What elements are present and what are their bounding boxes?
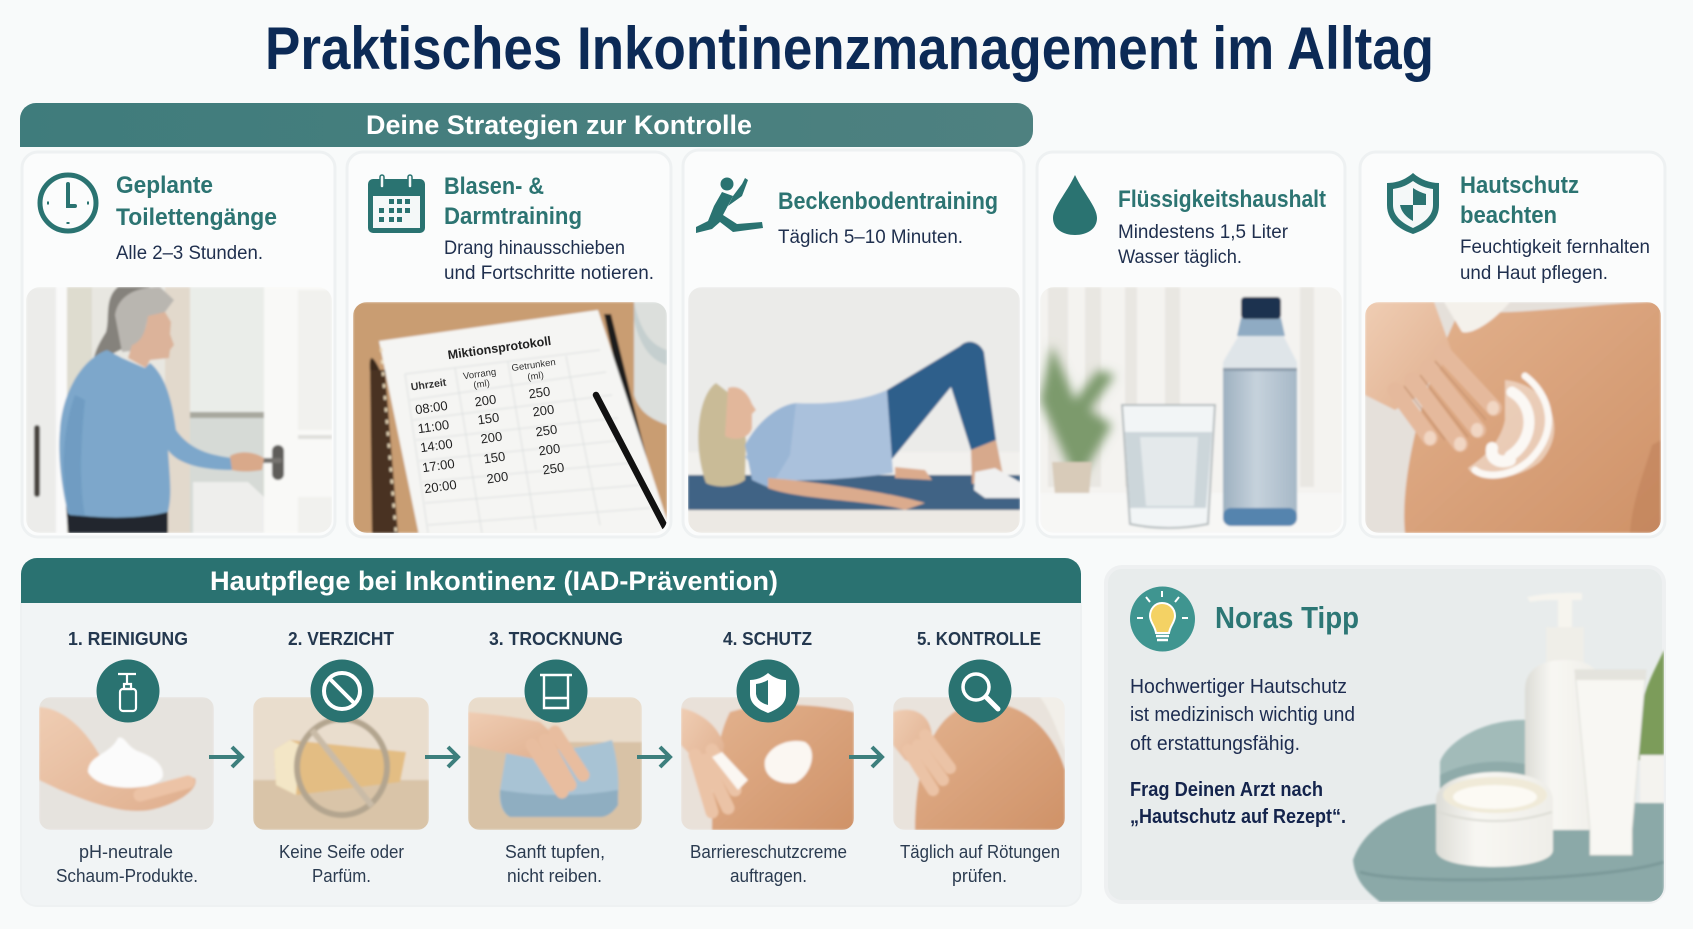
photo: voiding diary on desk: 14:00 <box>419 436 454 455</box>
photo: voiding diary on desk: 150 <box>483 449 506 466</box>
photo: foam in hand <box>39 697 214 830</box>
step heading: 1. REINIGUNG <box>68 629 188 649</box>
icon: clock <box>40 175 96 231</box>
step 5: Kontrolle <box>893 629 1065 886</box>
heading: Beckenbodentraining: Beckenbodentraining <box>778 188 998 215</box>
heading banner: Deine Strategien zur Kontrolle: Deine Strategien zur Kontrolle <box>366 110 752 140</box>
heading: Hautschutz beachten: beachten <box>1460 202 1557 229</box>
photo: voiding diary on desk: 200 <box>480 429 503 446</box>
photo: voiding diary on desk: (ml) <box>527 370 545 383</box>
panel: Hautschutz beachten <box>1360 152 1665 537</box>
heading: Hautschutz beachten: Hautschutz <box>1460 172 1579 199</box>
icon: shield <box>1387 173 1439 234</box>
panel: Geplante Toilettengänge <box>22 152 335 537</box>
text: Alle 2–3 Stunden: Alle 2–3 Stunden. <box>116 243 263 264</box>
panel: Flüssigkeitshaushalt <box>1037 152 1345 537</box>
heading: Blasen- & Darmtraining: Darmtraining <box>444 203 582 230</box>
step heading: 3. TROCKNUNG <box>489 629 623 649</box>
step heading: 5. KONTROLLE <box>917 629 1041 649</box>
text: Täglich 5–10 Minuten: Täglich 5–10 Minuten. <box>778 227 963 248</box>
caption: pH-neutrale <box>79 842 173 862</box>
photo: voiding diary on desk: (ml) <box>473 378 491 391</box>
icon: calendar <box>368 175 425 233</box>
photo: voiding diary on desk: 200 <box>538 441 561 458</box>
heading banner: Hautpflege <box>21 558 1081 603</box>
panel: Beckenbodentraining <box>683 150 1024 537</box>
text: Drang hinausschieben: und Fortschritte notieren. <box>444 263 654 284</box>
caption: prüfen. <box>952 866 1007 886</box>
heading: Geplante Toilettengänge: Toilettengänge <box>116 204 277 231</box>
arrow <box>425 747 458 767</box>
heading: Geplante Toilettengänge: Geplante <box>116 172 213 199</box>
step 3: Trocknung <box>468 629 642 886</box>
icon: pump bottle <box>96 660 160 722</box>
photo: cream on skin <box>681 697 854 830</box>
icon: exercise figure <box>696 178 763 233</box>
step 1: Reinigung <box>39 629 214 886</box>
step 4: Schutz <box>681 629 854 886</box>
caption: Parfüm. <box>312 866 371 886</box>
photo: cream applied to skin <box>1365 302 1661 533</box>
photo: skincare products on towels <box>1353 593 1664 902</box>
caption: Schaum-Produkte. <box>56 866 198 886</box>
heading: Flüssigkeitshaushalt: Flüssigkeitshaushalt <box>1118 186 1326 213</box>
photo: voiding diary on desk: Vorrang <box>462 367 497 382</box>
step heading: 2. VERZICHT <box>288 629 394 649</box>
photo: voiding diary on desk: Uhrzeit <box>410 377 448 393</box>
text: Mindestens 1,5 Liter: Wasser täglich. <box>1118 247 1242 268</box>
text: Feuchtigkeit fernhalten: und Haut pflegen. <box>1460 263 1608 284</box>
photo: woman doing bridge <box>688 287 1020 533</box>
photo: voiding diary on desk: Getrunken <box>511 357 556 374</box>
heading: Noras Tipp: Noras Tipp <box>1215 600 1359 635</box>
text: Feuchtigkeit fernhalten: Feuchtigkeit fernhalten <box>1460 237 1650 258</box>
photo: voiding diary on desk: 200 <box>486 469 509 486</box>
step 2: Verzicht <box>253 629 429 886</box>
arrow <box>849 747 882 767</box>
photo: voiding diary on desk: 250 <box>528 384 551 401</box>
icon: light bulb <box>1130 586 1195 652</box>
photo: hand on towel <box>468 697 642 830</box>
title: Praktisches Inkontinenzmanagement im Alltag <box>265 15 1434 82</box>
photo: voiding diary on desk: 17:00 <box>421 456 456 475</box>
photo: voiding diary on desk: 250 <box>535 422 558 439</box>
heading: Blasen- & Darmtraining: Blasen- & <box>444 173 544 200</box>
text: tip call to action: „Hautschutz auf Rezept“. <box>1130 806 1346 828</box>
caption: Keine Seife oder <box>279 842 404 862</box>
arrow <box>637 747 670 767</box>
photo: voiding diary on desk: 150 <box>477 410 500 427</box>
icon: towel <box>524 660 588 722</box>
caption: Täglich auf Rötungen <box>900 842 1060 862</box>
photo: voiding diary on desk: 11:00 <box>417 417 450 436</box>
heading banner: Hautpflege: Hautpflege bei Inkontinenz (IAD-Prävention) <box>210 566 778 596</box>
text: Mindestens 1,5 Liter: Mindestens 1,5 Liter <box>1118 222 1289 243</box>
photo: voiding diary on desk: 250 <box>542 460 565 477</box>
text: tip call to action: Frag Deinen Arzt nach <box>1130 779 1323 801</box>
caption: nicht reiben. <box>507 866 602 886</box>
icon: water drop <box>1053 175 1097 235</box>
photo: voiding diary on desk: 20:00 <box>423 477 458 496</box>
panel: Hautpflege bei Inkontinenz <box>21 558 1081 906</box>
photo: soap with prohibition ring <box>253 697 429 830</box>
photo: woman at door <box>26 287 332 533</box>
panel: Blasen- & Darmtraining <box>347 152 671 540</box>
text: Drang hinausschieben: Drang hinausschieben <box>444 238 625 259</box>
caption: auftragen. <box>730 866 807 886</box>
text: tip body: Hochwertiger Hautschutz <box>1130 676 1347 698</box>
photo: water glass and bottle <box>1040 287 1342 533</box>
text: tip body: ist medizinisch wichtig und <box>1130 704 1355 726</box>
photo: voiding diary on desk: Miktionsprotokoll <box>447 334 552 362</box>
photo: voiding diary on desk: 200 <box>474 392 497 409</box>
photo: voiding diary on desk: 200 <box>532 402 555 419</box>
photo: voiding diary on desk: 08:00 <box>414 398 449 417</box>
panel: Noras Tipp <box>1106 567 1664 902</box>
caption: Barriereschutzcreme <box>690 842 847 862</box>
step heading: 4. SCHUTZ <box>723 629 812 649</box>
photo: skin check <box>893 697 1065 830</box>
arrow <box>209 747 242 767</box>
heading banner: Deine Strategien zur Kontrolle <box>20 103 1033 147</box>
icon: shield <box>736 660 800 722</box>
caption: Sanft tupfen, <box>505 842 605 862</box>
icon: prohibition sign <box>310 660 374 722</box>
icon: magnifier <box>948 660 1012 722</box>
photo: voiding diary on desk <box>353 302 667 540</box>
text: tip body: oft erstattungsfähig. <box>1130 733 1300 755</box>
